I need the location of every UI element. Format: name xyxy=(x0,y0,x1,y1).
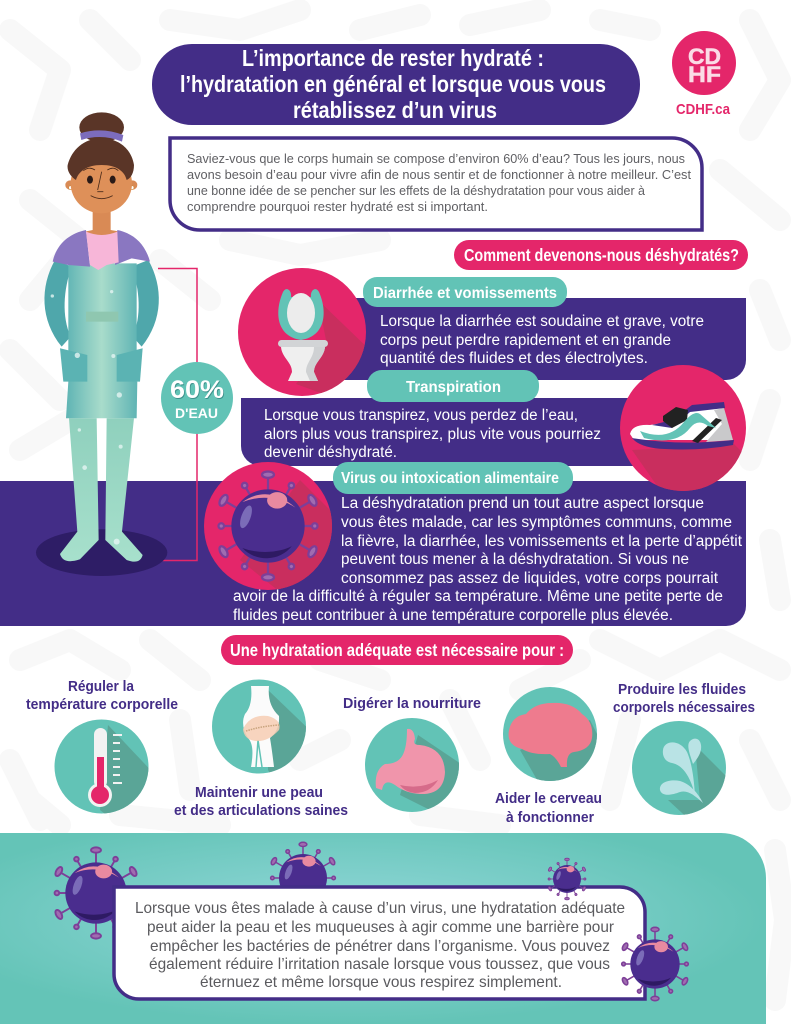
jacket pockets xyxy=(60,348,87,382)
callout: 60% water: 60% xyxy=(170,376,224,404)
icon: virus top left xyxy=(54,847,138,939)
dress xyxy=(66,263,137,418)
label: à fonctionner xyxy=(506,809,594,826)
title banner xyxy=(152,44,640,125)
callout text box xyxy=(114,887,645,999)
body text xyxy=(233,495,743,624)
icon: knee xyxy=(212,680,306,774)
callout: 60% water: D'EAU xyxy=(175,405,218,421)
logo: CDHF: CDHF.ca xyxy=(676,101,731,118)
heading: hydration is necessary for xyxy=(221,635,573,665)
panel: perspiration xyxy=(241,365,760,500)
top xyxy=(86,232,119,270)
panel: virus or food poisoning xyxy=(204,462,743,624)
callout: 60% water: 60% xyxy=(171,377,225,405)
title banner: L’importance de rester hydraté : xyxy=(242,45,544,71)
arms xyxy=(44,260,72,347)
connector line xyxy=(158,268,197,560)
body text: quantité des fluides et des électrolytes. xyxy=(380,350,648,367)
item: skin and joints xyxy=(174,680,348,819)
body text: la fièvre, la diarrhée, les vomissements et la perte d’appétit xyxy=(341,533,743,550)
tag xyxy=(333,462,573,494)
intro text box xyxy=(170,138,702,230)
icon: shoe xyxy=(620,365,746,491)
title banner: l’hydratation en général et lorsque vous vous xyxy=(180,71,606,97)
neck xyxy=(85,210,120,247)
bottom panel xyxy=(0,833,766,1024)
label xyxy=(495,790,602,826)
item: regulate temperature xyxy=(26,680,178,814)
intro text box: Saviez-vous que le corps humain se compose d’environ 60% d’eau? Tous les jours, nous xyxy=(187,151,685,166)
panel bar xyxy=(340,298,746,380)
face xyxy=(71,153,132,213)
tag: Virus ou intoxication alimentaire xyxy=(341,470,559,487)
body text xyxy=(264,407,601,461)
body text: avoir de la difficulté à réguler sa température. Même une petite perte de xyxy=(233,588,723,605)
label xyxy=(613,681,755,716)
eyes xyxy=(87,176,93,184)
label xyxy=(174,784,348,819)
legs xyxy=(60,418,99,561)
label: et des articulations saines xyxy=(174,802,348,819)
label: Maintenir une peau xyxy=(195,784,323,801)
label: Produire les fluides xyxy=(618,681,746,698)
item: help the brain xyxy=(495,687,602,822)
logo: CDHF xyxy=(672,31,736,118)
callout text box: éternuez et même lorsque vous respirez simplement. xyxy=(200,974,562,991)
body text: alors plus vous transpirez, plus vite vous pourriez xyxy=(264,426,601,443)
intro text box: comprendre pourquoi rester hydraté est si important. xyxy=(187,199,488,214)
label: corporels nécessaires xyxy=(613,699,755,716)
mouth and nose xyxy=(91,172,113,199)
label: Aider le cerveau xyxy=(495,790,602,807)
label: Digérer la nourriture xyxy=(343,695,481,712)
panel: diarrhea and vomiting xyxy=(238,268,746,400)
icon: virus bottom right xyxy=(621,927,689,1001)
heading: how we get dehydrated: Comment devenons-nous déshydratés? xyxy=(464,245,739,265)
sparkles xyxy=(51,290,123,545)
callout text box: empêcher les bactéries de pénétrer dans l’organisme. Vous pouvez xyxy=(150,938,610,955)
icon: toilet xyxy=(238,268,372,400)
callout text box: peut aider la peau et les muqueuses à agir comme une barrière pour xyxy=(147,919,615,936)
body text: corps peut perdre rapidement et en grande xyxy=(380,332,671,349)
icon: virus top center xyxy=(270,842,336,914)
logo: CDHF: CD xyxy=(688,44,721,69)
icon: virus small xyxy=(548,858,586,900)
callout text box: également réduire l’irritation nasale lorsque vous toussez, que vous xyxy=(149,956,610,973)
label: Réguler la xyxy=(68,678,135,695)
icon: water drops xyxy=(632,721,726,815)
body text xyxy=(380,313,704,367)
body text: Lorsque vous transpirez, vous perdez de l’eau, xyxy=(264,407,578,424)
callout: 60% water xyxy=(161,362,233,434)
body text: Lorsque la diarrhée est soudaine et grave, votre xyxy=(380,313,704,330)
item: digest food xyxy=(343,695,481,815)
label xyxy=(26,678,178,713)
item: body fluids xyxy=(613,681,755,825)
body text: consommez pas assez de liquides, votre corps pourrait xyxy=(341,570,719,587)
bun xyxy=(79,112,124,142)
panel bar xyxy=(241,398,660,466)
icon: stomach xyxy=(365,718,459,812)
figure: woman 60% water xyxy=(36,112,167,576)
callout text box: Lorsque vous êtes malade à cause d’un virus, une hydratation adéquate xyxy=(135,900,625,917)
body text: La déshydratation prend un tout autre aspect lorsque xyxy=(341,495,704,512)
tag: Transpiration xyxy=(406,379,501,396)
tag xyxy=(363,277,567,307)
icon: brain xyxy=(503,687,597,781)
title banner: rétablissez d’un virus xyxy=(293,97,497,123)
tag xyxy=(367,370,539,402)
shoulders xyxy=(53,230,90,267)
hair xyxy=(68,138,134,180)
headband xyxy=(80,130,123,142)
label: température corporelle xyxy=(26,696,178,713)
body text: vous êtes malade, car les symptômes communs, comme xyxy=(341,514,732,531)
body text: fluides peut contribuer à une température corporelle plus élevée. xyxy=(233,607,673,624)
logo: CDHF: HF xyxy=(688,62,721,87)
body text: peuvent tous mener à la déshydratation. Si vous ne xyxy=(341,551,689,568)
bar: virus section background xyxy=(0,481,746,626)
heading: hydration is necessary for: Une hydratation adéquate est nécessaire pour : xyxy=(230,640,564,660)
tag: Diarrhée et vomissements xyxy=(373,285,557,302)
intro text box: avons besoin d’eau pour vivre afin de nous sentir et de fonctionner à notre meilleur. C’est xyxy=(187,167,691,182)
intro text box: une bonne idée de se pencher sur les effets de la déshydratation pour vous aider à xyxy=(187,183,646,198)
icon: virus xyxy=(204,462,332,590)
heading: how we get dehydrated xyxy=(454,240,748,270)
body text: devenir déshydraté. xyxy=(264,444,397,461)
icon: thermometer xyxy=(54,720,148,814)
ears xyxy=(65,180,75,190)
